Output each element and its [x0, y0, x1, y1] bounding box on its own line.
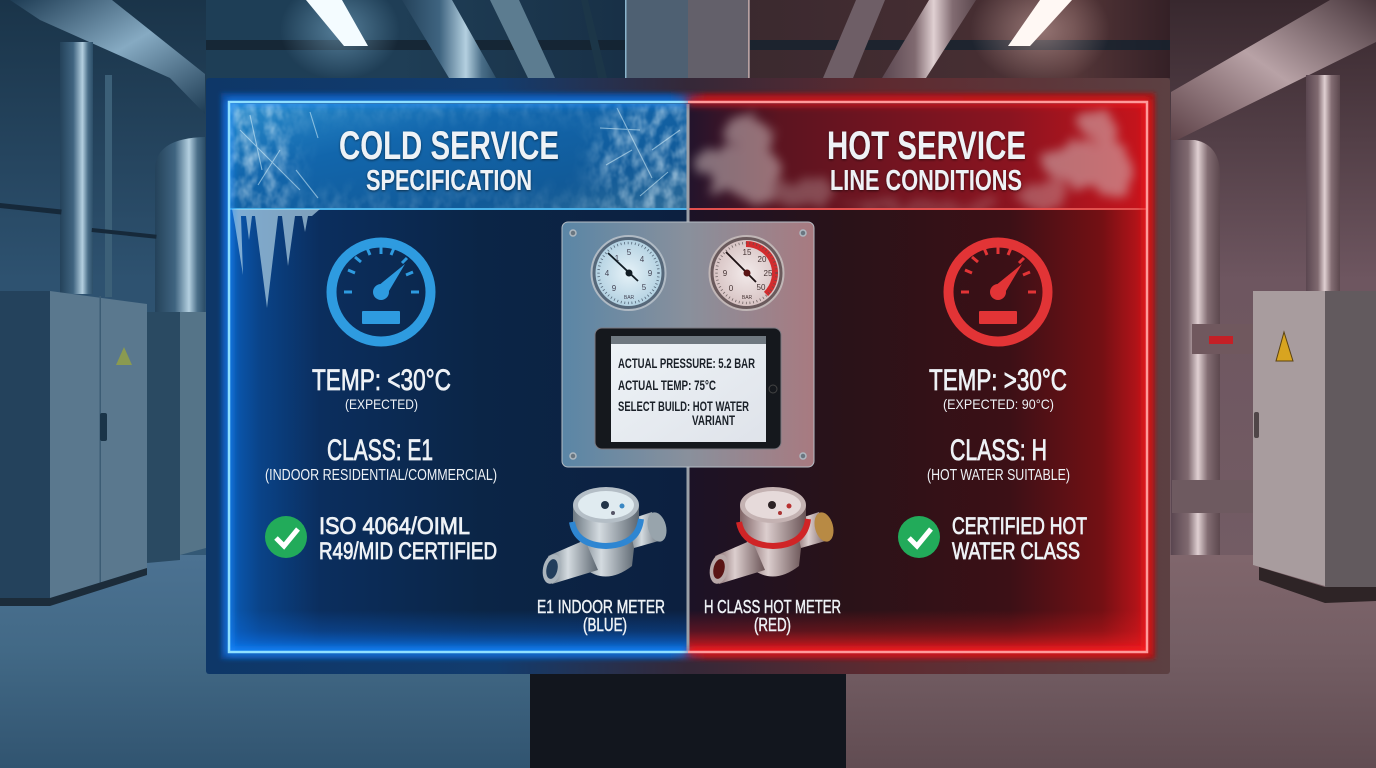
tablet readout: ACTUAL PRESSURE: 5.2 BAR: [618, 356, 755, 371]
neon frame: red half: [688, 102, 1147, 652]
cold header divider: [230, 208, 688, 210]
floor right: [688, 555, 1376, 768]
hot temp reading: TEMP: >30°C: [929, 364, 1067, 397]
gauge: cold pressure: 4: [640, 255, 645, 264]
icon: hot speedometer: [948, 242, 1048, 342]
label: E1 meter: [537, 597, 665, 635]
hot temp note: (EXPECTED: 90°C): [943, 396, 1054, 412]
cabinets right: [1253, 291, 1376, 603]
icon: cold check badge: [265, 516, 307, 558]
gauge: hot temperature: [710, 236, 784, 310]
wall right: [688, 0, 1376, 560]
gauge: cold pressure: 5: [627, 248, 632, 257]
gauge: cold pressure: 4: [605, 269, 610, 278]
ceiling left: [206, 0, 688, 78]
cold temp note: (EXPECTED): [345, 396, 418, 412]
hot certification: WATER CLASS: [952, 538, 1080, 565]
cabinets left: [0, 291, 206, 606]
overhead duct right: [1171, 0, 1376, 143]
tablet: [595, 328, 781, 449]
icicles: [232, 209, 320, 308]
cold body background: [228, 102, 688, 652]
overhead duct left: [10, 0, 205, 114]
stand: [530, 674, 846, 768]
gauge: cold pressure: 9: [648, 269, 653, 278]
gauge: cold pressure: 1: [615, 254, 620, 263]
hot body background: [688, 102, 1148, 652]
cold class: CLASS: E1: [327, 434, 433, 467]
title: cold service: COLD SERVICE: [339, 124, 559, 168]
floor left: [0, 555, 688, 768]
cold class note: (INDOOR RESIDENTIAL/COMMERCIAL): [265, 467, 497, 484]
cold temp reading: TEMP: <30°C: [312, 364, 451, 397]
tablet readout: SELECT BUILD: HOT WATER: [618, 399, 749, 414]
title: hot service: HOT SERVICE: [827, 124, 1026, 168]
gauge: hot temperature: 15: [743, 248, 752, 257]
panel: hot side: [688, 102, 1148, 652]
subtitle: specification: SPECIFICATION: [366, 165, 532, 197]
board frame: [206, 78, 1170, 674]
panel: cold side: [230, 103, 688, 651]
cold certification: [319, 513, 497, 565]
display board: [206, 78, 1170, 674]
ceiling light left: [280, 0, 400, 80]
hot certification: [952, 513, 1087, 565]
label: H class meter: (RED): [754, 615, 791, 635]
pipes left: [0, 42, 205, 315]
icon: hot check badge: [898, 516, 940, 558]
cold certification: R49/MID CERTIFIED: [319, 538, 497, 565]
neon frame: blue half: [229, 102, 688, 652]
ceiling pipes right: [823, 0, 976, 78]
gauge: cold pressure: BAR: [624, 295, 635, 301]
panel: central instrument plate: [562, 222, 814, 467]
steam clouds: [700, 112, 1132, 212]
wall left: [0, 0, 688, 560]
subtitle: line conditions: LINE CONDITIONS: [830, 165, 1022, 197]
cold header band: [230, 104, 688, 209]
tablet readout: VARIANT: [692, 413, 736, 428]
hot certification: CERTIFIED HOT: [952, 513, 1087, 540]
cold certification: ISO 4064/OIML: [319, 513, 470, 540]
hot class note: (HOT WATER SUITABLE): [927, 467, 1070, 484]
gauge: cold pressure: [592, 236, 666, 310]
ceiling light right: [970, 0, 1110, 85]
ceiling pipes left: [402, 0, 607, 78]
ceiling right: [688, 0, 1170, 78]
central column: [625, 0, 750, 78]
hot class: CLASS: H: [950, 434, 1047, 467]
meter: E1 blue: [540, 487, 670, 586]
gauge: hot temperature: 0: [729, 284, 734, 293]
label: E1 meter: (BLUE): [583, 615, 627, 635]
icon: cold speedometer: [332, 242, 430, 342]
plate screws: [570, 230, 806, 459]
gauge: hot temperature: 50: [757, 283, 766, 292]
gauge: hot temperature: BAR: [742, 295, 753, 301]
frost texture: [230, 104, 686, 208]
center divider: [686, 104, 690, 652]
gauge: hot temperature: 20: [758, 255, 767, 264]
label: E1 meter: E1 INDOOR METER: [537, 597, 665, 617]
gauge: hot temperature: 25: [764, 269, 773, 278]
gauge: cold pressure: 5: [642, 283, 647, 292]
tablet readout: [618, 356, 755, 428]
gauge: cold pressure: 9: [612, 284, 617, 293]
meter: H class red: [707, 487, 837, 586]
gauge: hot temperature: 9: [723, 269, 728, 278]
label: H class meter: H CLASS HOT METER: [704, 597, 841, 617]
label: H class meter: [704, 597, 841, 635]
hot header band: [688, 104, 1146, 209]
pipes right: [1171, 75, 1340, 555]
tablet readout: ACTUAL TEMP: 75°C: [618, 378, 716, 393]
hot header divider: [688, 208, 1146, 210]
